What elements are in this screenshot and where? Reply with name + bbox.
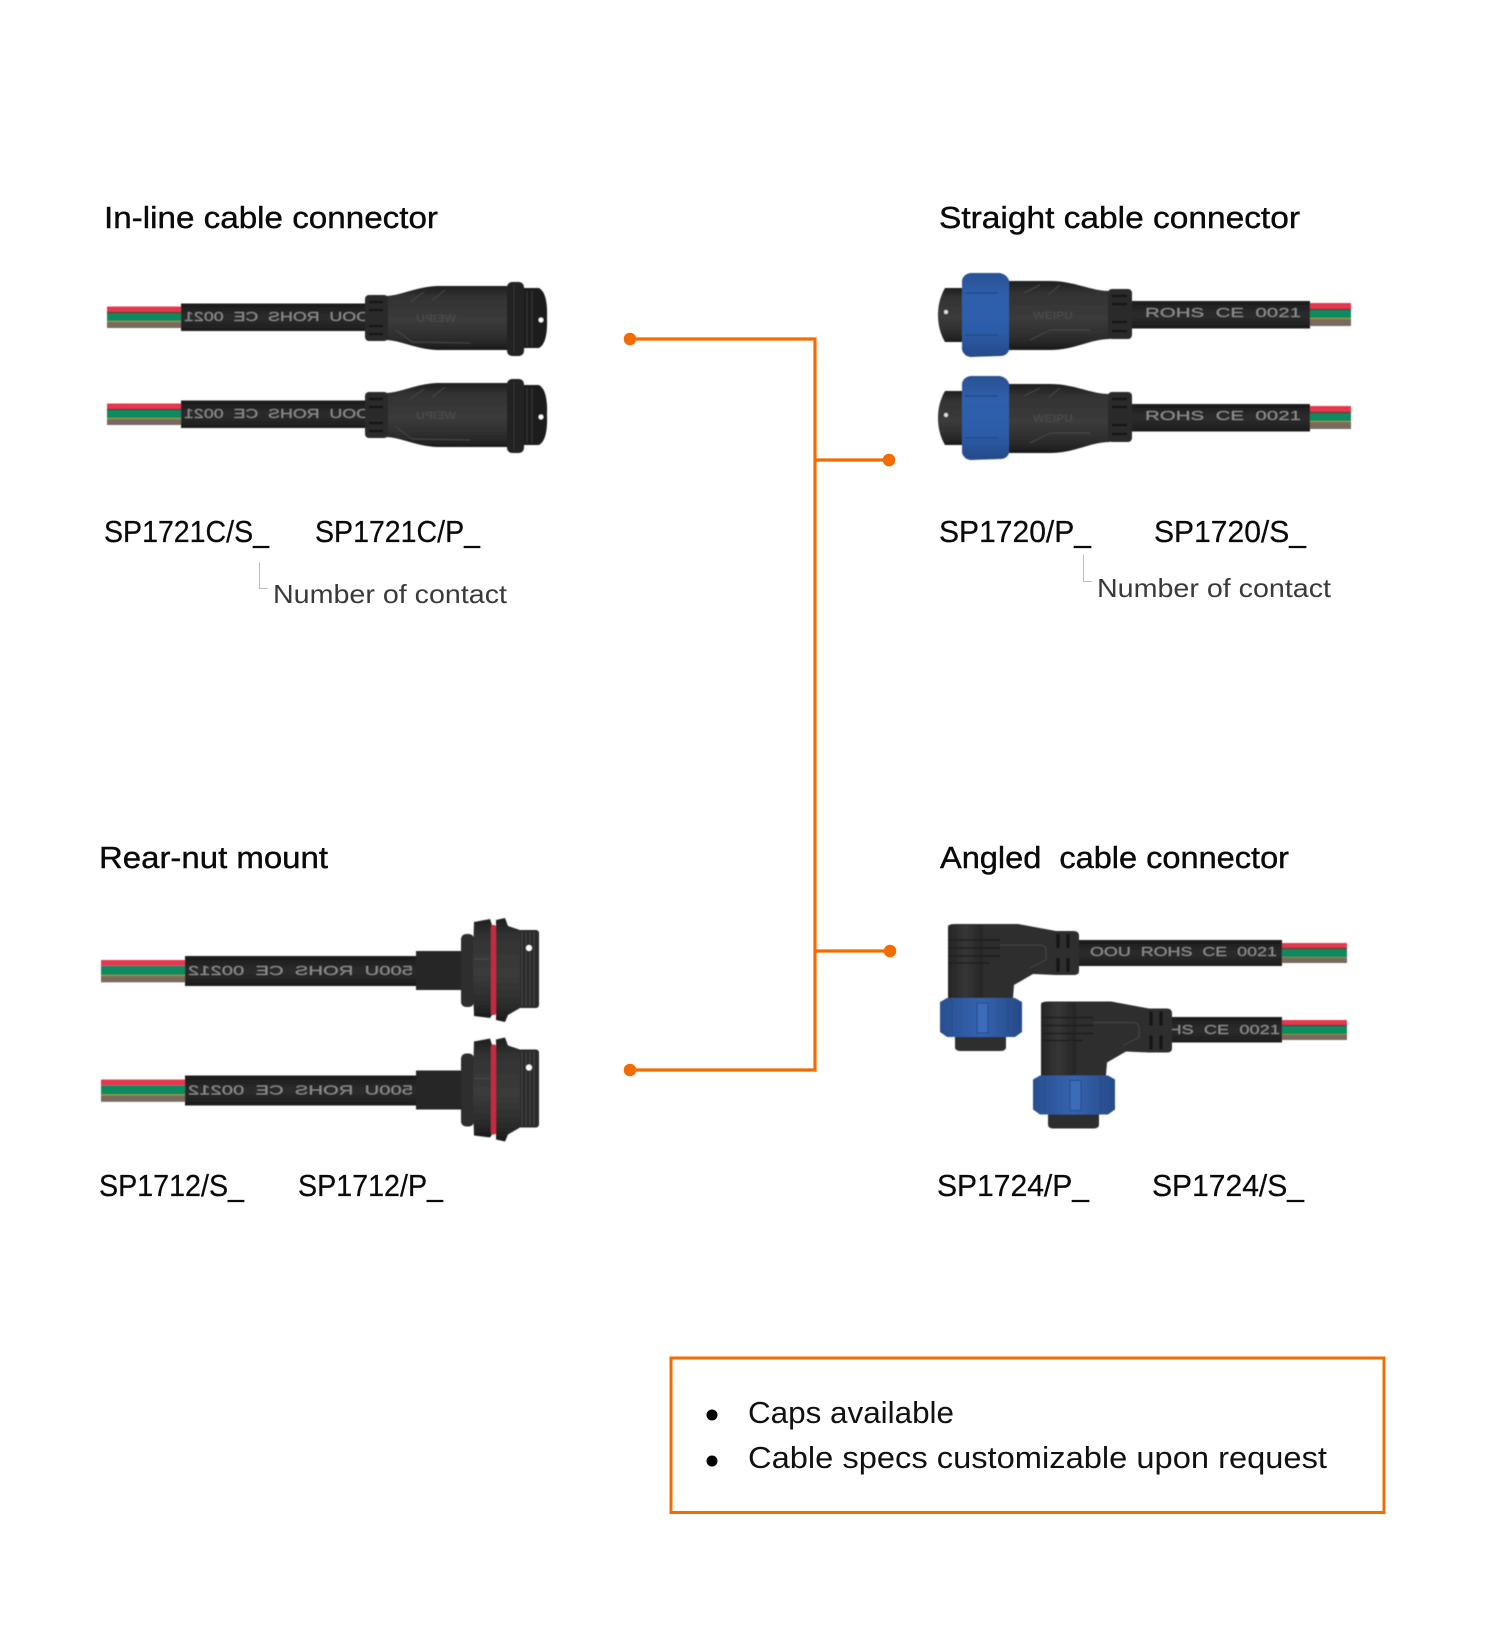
part number: SP1712/P: SP1712/P_: [298, 1168, 444, 1203]
part number: SP1712/S: SP1712/S_: [99, 1168, 245, 1203]
heading: angled cable connector: Angled cable connector: [940, 840, 1289, 875]
callout: number of contact: [1084, 555, 1332, 603]
connector image: angled, lower: [1033, 1002, 1347, 1128]
panel: angled cable connector: [937, 840, 1347, 1203]
callout: number of contact: Number of contact: [1097, 573, 1332, 603]
connector image: angled, upper: OOU ROHS CE 0021: [1090, 944, 1277, 959]
connector image: in-line, lower: OOU ROHS CE 0021: [184, 406, 370, 421]
panel: rear-nut mount: [99, 840, 539, 1203]
connector image: rear-nut, lower: 500U ROHS CE 00212: [188, 1082, 413, 1098]
callout: notes box: [671, 1358, 1384, 1512]
connector image: straight, upper: [938, 273, 1351, 357]
callout: number of contact: [260, 562, 508, 609]
connector image: angled, upper: [940, 924, 1347, 1051]
part number: SP1724/P: SP1724/P_: [937, 1168, 1090, 1203]
bullet: cable specs: Cable specs customizable upon request: [748, 1440, 1327, 1475]
part number: SP1721C/S: SP1721C/S_: [104, 514, 270, 549]
heading: rear-nut mount: Rear-nut mount: [99, 840, 328, 875]
connector image: straight, upper: WEIPU: [1033, 310, 1073, 322]
connector image: in-line, upper: OOU ROHS CE 0021: [184, 309, 370, 324]
part number: SP1721C/P: SP1721C/P_: [315, 514, 481, 549]
connector image: in-line, upper: WEIPU: [416, 313, 456, 325]
connector image: in-line, lower: WEIPU: [416, 410, 456, 422]
connector image: straight, upper: ROHS CE 0021: [1145, 305, 1301, 320]
connector lines: orange bracket with dots: [624, 333, 896, 1076]
part number: SP1720/P: SP1720/P_: [939, 514, 1092, 549]
connector image: straight, lower: WEIPU: [1033, 413, 1073, 425]
connector image: rear-nut, lower: [101, 1038, 539, 1142]
panel: in-line cable connector: [104, 200, 547, 609]
callout: number of contact: Number of contact: [273, 579, 508, 609]
part number: SP1720/S: SP1720/S_: [1154, 514, 1307, 549]
part number: SP1724/S: SP1724/S_: [1152, 1168, 1305, 1203]
connector image: in-line, upper: [107, 282, 547, 356]
connector image: rear-nut, upper: [101, 918, 539, 1022]
connector image: straight, lower: ROHS CE 0021: [1145, 408, 1301, 423]
heading: straight cable connector: Straight cable connector: [939, 200, 1300, 235]
connector image: rear-nut, upper: 500U ROHS CE 00212: [188, 963, 413, 978]
heading: in-line cable connector: In-line cable connector: [104, 200, 438, 235]
panel: straight cable connector: [938, 200, 1351, 603]
connector image: in-line, lower: [107, 379, 547, 453]
bullet: caps available: Caps available: [748, 1395, 954, 1430]
connector image: straight, lower: [938, 376, 1351, 460]
connector image: angled, lower: ROHS CE 0021: [1141, 1022, 1280, 1037]
